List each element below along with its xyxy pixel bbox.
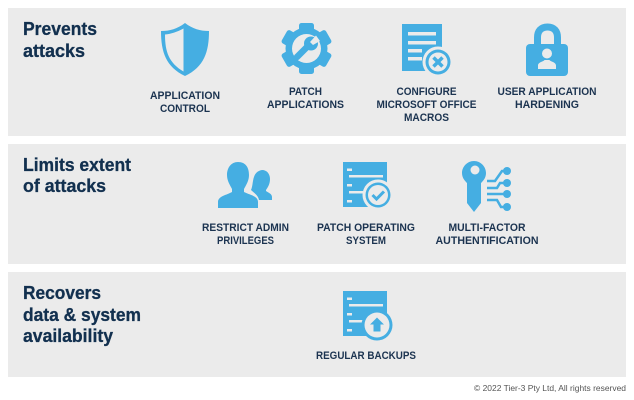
icon: gear with wrench [281, 23, 332, 74]
label: patch applications [267, 86, 344, 111]
heading: prevents attacks: Prevents [23, 19, 97, 39]
heading: limits extent of attacks: Limits extent [23, 155, 131, 175]
heading: recovers data and system availability: data & system [23, 305, 141, 325]
label: restrict admin privileges: PRIVILEGES [217, 235, 274, 247]
icon: document with cross [402, 24, 454, 78]
label: application control: APPLICATION [150, 90, 220, 102]
copyright: © 2022 Tier-3 Pty Ltd, All rights reserved [474, 383, 626, 393]
label: configure microsoft office macros: MACROS [404, 112, 449, 124]
icon: shield [161, 23, 209, 76]
label: configure microsoft office macros [376, 86, 476, 124]
label: multi-factor authentification: AUTHENTIFICATION [436, 235, 539, 247]
heading: prevents attacks [23, 19, 97, 61]
heading: recovers data and system availability [23, 283, 141, 346]
icon: admin users [218, 162, 272, 208]
label: application control [150, 90, 220, 115]
label: configure microsoft office macros: MICROSOFT OFFICE [376, 99, 476, 111]
heading: limits extent of attacks [23, 155, 131, 196]
label: user application hardening [498, 86, 597, 111]
icon: padlock [526, 27, 568, 76]
label: patch applications: PATCH [289, 86, 322, 98]
panel: recovers data and system availability [8, 272, 626, 377]
panel: limits extent of attacks [8, 144, 626, 264]
label: multi-factor authentification: MULTI-FACTOR [448, 222, 526, 234]
heading: limits extent of attacks: of attacks [23, 176, 106, 196]
icon: server with check [343, 162, 394, 210]
label: patch operating system [317, 222, 415, 247]
label: patch applications: APPLICATIONS [267, 99, 344, 111]
heading: prevents attacks: attacks [23, 41, 85, 61]
label: application control: CONTROL [160, 103, 210, 115]
heading: recovers data and system availability: Recovers [23, 283, 101, 303]
label: user application hardening: USER APPLICATION [498, 86, 597, 98]
label: restrict admin privileges: RESTRICT ADMIN [202, 222, 289, 234]
label: patch operating system: SYSTEM [346, 235, 386, 247]
label: multi-factor authentification [436, 222, 539, 247]
icon: server with upload [343, 291, 392, 340]
label: user application hardening: HARDENING [515, 99, 579, 111]
label: patch operating system: PATCH OPERATING [317, 222, 415, 234]
panel: prevents attacks [8, 8, 626, 136]
label: configure microsoft office macros: CONFIGURE [396, 86, 456, 98]
label: restrict admin privileges [202, 222, 289, 247]
label: regular backups: REGULAR BACKUPS [316, 350, 416, 362]
heading: recovers data and system availability: availability [23, 326, 113, 346]
icon: key with circuit [462, 161, 511, 212]
